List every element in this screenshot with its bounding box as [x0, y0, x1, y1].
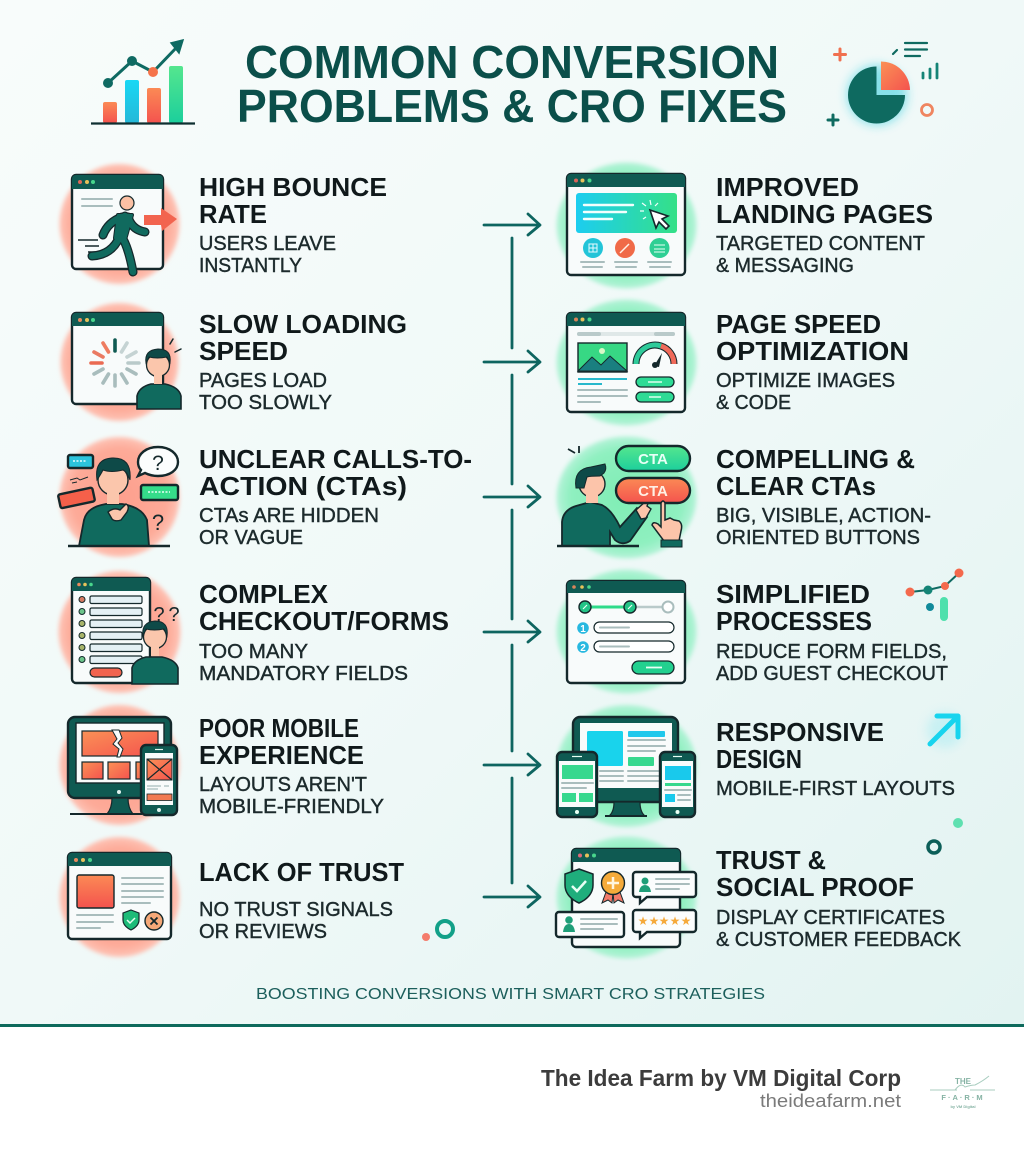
text block: COMPLEX: [199, 579, 329, 609]
footer brand text: [541, 1065, 901, 1111]
text block: NO TRUST SIGNALS: [199, 899, 393, 921]
text block: [199, 172, 387, 277]
text block: HIGH BOUNCE: [199, 172, 387, 202]
panel: problem 5 poor mobile experience: [60, 705, 384, 825]
decorative accent: mini line chart: [906, 568, 964, 621]
text block: [199, 444, 472, 549]
title: [237, 36, 787, 132]
text block: USERS LEAVE: [199, 233, 336, 255]
decorative accent: ring and dot: [422, 921, 453, 941]
text block: OR VAGUE: [199, 527, 303, 549]
text block: [716, 717, 955, 800]
icon: pie chart: [828, 43, 937, 125]
footer band: [0, 1024, 1024, 1154]
panel: fix 4 simplified processes: [556, 570, 948, 694]
panel: fix 3 compelling CTAs: [556, 436, 931, 558]
text block: POOR MOBILE: [199, 713, 359, 743]
footer logo: [930, 1076, 995, 1109]
icon: runner leaving window: [60, 164, 180, 284]
icon: responsive devices: [556, 705, 696, 827]
text block: RESPONSIVE: [716, 717, 884, 747]
text block: CHECKOUT/FORMS: [199, 606, 449, 636]
text block: MOBILE-FRIENDLY: [199, 796, 384, 818]
icon: broken desktop and phone: [60, 705, 180, 825]
text block: PROCESSES: [716, 606, 872, 636]
text block: OR REVIEWS: [199, 921, 327, 943]
icon: person pointing at CTA buttons: CTA: [638, 483, 668, 500]
decorative accent: cyan arrow: [927, 712, 963, 748]
footer logo: F·A·R·M: [941, 1093, 985, 1102]
text block: REDUCE FORM FIELDS,: [716, 641, 947, 663]
text block: & CODE: [716, 392, 791, 414]
icon: growth chart: [91, 40, 195, 124]
text block: [716, 172, 933, 277]
text block: EXPERIENCE: [199, 740, 364, 770]
text block: BIG, VISIBLE, ACTION-: [716, 505, 931, 527]
icon: page with gauge: [556, 300, 696, 426]
text block: TRUST &: [716, 845, 826, 875]
text block: SPEED: [199, 336, 288, 366]
text block: [716, 309, 909, 414]
icon: trust badges and reviews: ★: [681, 914, 691, 928]
icon: trust badges and reviews: ★: [670, 914, 680, 928]
text block: & CUSTOMER FEEDBACK: [716, 929, 962, 951]
panel: fix 5 responsive design: [556, 705, 955, 827]
text block: OPTIMIZE IMAGES: [716, 370, 895, 392]
tagline: BOOSTING CONVERSIONS WITH SMART CRO STRATEGIES: [256, 986, 765, 1003]
footer brand text: theideafarm.net: [760, 1091, 901, 1111]
icon: confused person with buttons: ?: [152, 452, 164, 475]
text block: SOCIAL PROOF: [716, 872, 914, 902]
text block: DESIGN: [716, 744, 802, 774]
text block: TOO SLOWLY: [199, 392, 332, 414]
panel: problem 3 unclear CTAs: [58, 437, 472, 557]
text block: UNCLEAR CALLS-TO-: [199, 444, 472, 474]
text block: CTAs ARE HIDDEN: [199, 505, 379, 527]
connector arrows: [484, 214, 540, 907]
text block: MANDATORY FIELDS: [199, 663, 408, 685]
text block: CLEAR CTAs: [716, 471, 876, 501]
text block: TARGETED CONTENT: [716, 233, 925, 255]
icon: trust badges and reviews: ★: [659, 914, 669, 928]
text block: SIMPLIFIED: [716, 579, 870, 609]
text block: ORIENTED BUTTONS: [716, 527, 920, 549]
text block: MOBILE-FIRST LAYOUTS: [716, 778, 955, 800]
text block: [199, 309, 407, 414]
text block: COMPELLING &: [716, 444, 915, 474]
text block: DISPLAY CERTIFICATES: [716, 907, 945, 929]
text block: ADD GUEST CHECKOUT: [716, 663, 948, 685]
text block: SLOW LOADING: [199, 309, 407, 339]
text block: TOO MANY: [199, 641, 308, 663]
panel: problem 2 slow loading: [60, 303, 407, 421]
text block: LACK OF TRUST: [199, 857, 404, 887]
text block: [716, 845, 962, 951]
footer logo: by VM Digital: [950, 1104, 976, 1109]
panel: problem 1 high bounce rate: [60, 164, 387, 284]
text block: [199, 857, 404, 943]
text block: PAGE SPEED: [716, 309, 881, 339]
footer logo: THE: [955, 1077, 972, 1086]
icon: landing page with cursor: [556, 162, 696, 288]
text block: IMPROVED: [716, 172, 859, 202]
icon: long form and confused user: ?: [168, 604, 180, 626]
icon: confused person with buttons: [58, 437, 180, 557]
text block: LAYOUTS AREN'T: [199, 774, 367, 796]
icon: loading spinner and frustrated user: [60, 303, 181, 421]
text block: PAGES LOAD: [199, 370, 327, 392]
icon: person pointing at CTA buttons: CTA: [638, 451, 668, 468]
text block: [199, 579, 449, 685]
icon: long form and confused user: [58, 571, 180, 693]
panel: fix 2 page speed: [556, 300, 909, 426]
text block: ACTION (CTAs): [199, 471, 407, 501]
text block: RATE: [199, 199, 267, 229]
text block: OPTIMIZATION: [716, 336, 909, 366]
icon: confused person with buttons: ?: [152, 510, 164, 535]
panel: problem 4 complex checkout: [58, 571, 449, 693]
text block: [716, 444, 931, 549]
panel: fix 6 trust and social proof: [556, 836, 962, 958]
icon: person pointing at CTA buttons: [556, 436, 696, 558]
text block: INSTANTLY: [199, 255, 302, 277]
icon: trust badges and reviews: [556, 836, 696, 958]
footer brand text: The Idea Farm by VM Digital Corp: [541, 1065, 901, 1091]
panel: problem 6 lack of trust: [60, 837, 404, 957]
icon: page without trust signals: [60, 837, 180, 957]
icon: trust badges and reviews: ★: [649, 914, 659, 928]
text block: [199, 713, 384, 818]
icon: long form and confused user: ?: [153, 604, 165, 626]
icon: simplified form steps: 2: [580, 643, 586, 654]
panel: fix 1 landing pages: [556, 162, 933, 288]
icon: simplified form steps: [556, 570, 696, 694]
text block: LANDING PAGES: [716, 199, 933, 229]
icon: simplified form steps: 1: [580, 624, 586, 635]
decorative accent: green dot and ring: [928, 818, 963, 853]
text block: & MESSAGING: [716, 255, 854, 277]
icon: trust badges and reviews: ★: [638, 914, 648, 928]
text block: [716, 579, 948, 685]
title: COMMON CONVERSION: [245, 36, 779, 88]
title: PROBLEMS & CRO FIXES: [237, 80, 787, 132]
